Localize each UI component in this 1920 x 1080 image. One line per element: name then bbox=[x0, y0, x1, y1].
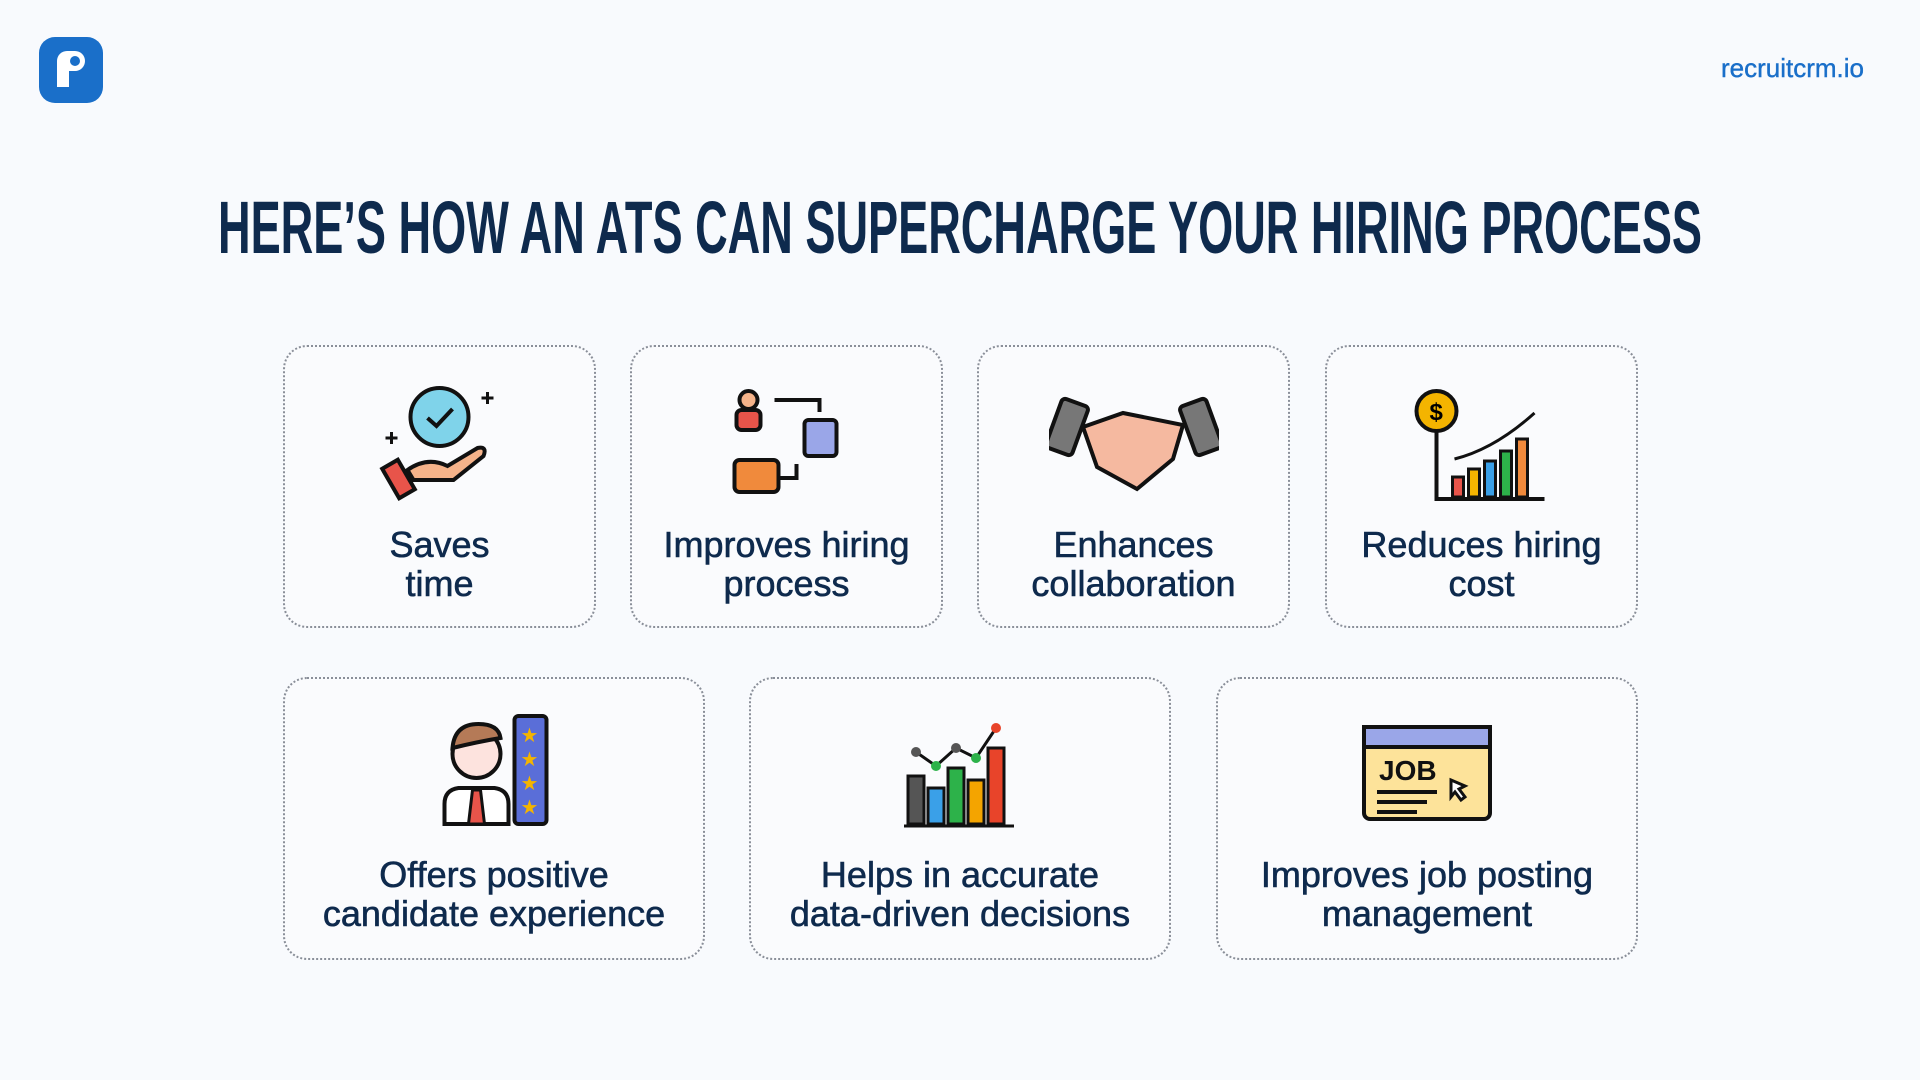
icon: cost chart bbox=[1414, 389, 1544, 501]
card: candidate experience bbox=[283, 677, 705, 960]
label bbox=[323, 854, 665, 934]
label: data-driven decisions bbox=[790, 893, 1130, 934]
icon: candidate rating bbox=[442, 714, 548, 826]
label bbox=[663, 524, 910, 604]
card: improves hiring process bbox=[630, 345, 943, 628]
label bbox=[1031, 524, 1236, 604]
icon: bar chart bbox=[904, 723, 1014, 828]
label: Saves bbox=[389, 524, 490, 565]
logo bbox=[39, 37, 103, 103]
icon: job window: JOB bbox=[1379, 755, 1437, 786]
card: reduces hiring cost bbox=[1325, 345, 1638, 628]
label: time bbox=[405, 563, 474, 604]
label bbox=[1361, 524, 1602, 604]
label bbox=[790, 854, 1130, 934]
icon: handshake bbox=[1049, 396, 1219, 492]
label: process bbox=[723, 563, 850, 604]
label: management bbox=[1322, 893, 1532, 934]
card: data-driven decisions bbox=[749, 677, 1171, 960]
icon: candidate rating: ★ bbox=[520, 797, 538, 819]
icon: candidate rating: ★ bbox=[520, 773, 538, 795]
icon: candidate rating: ★ bbox=[520, 749, 538, 771]
icon: job window bbox=[1362, 725, 1492, 821]
label: Enhances bbox=[1053, 524, 1214, 565]
icon: candidate rating: ★ bbox=[520, 725, 538, 747]
label bbox=[1261, 854, 1593, 934]
label: Improves hiring bbox=[663, 524, 910, 565]
icon: process bbox=[732, 389, 838, 494]
icon: clock in hand bbox=[380, 386, 494, 501]
card: job posting bbox=[1216, 677, 1638, 960]
brand url: recruitcrm.io bbox=[1721, 53, 1864, 83]
label: collaboration bbox=[1031, 563, 1236, 604]
label bbox=[389, 524, 490, 604]
label: candidate experience bbox=[323, 893, 665, 934]
label: Offers positive bbox=[379, 854, 609, 895]
label: Improves job posting bbox=[1261, 854, 1593, 895]
card: enhances collaboration bbox=[977, 345, 1290, 628]
label: Helps in accurate bbox=[821, 854, 1099, 895]
label: cost bbox=[1448, 563, 1515, 604]
label: Reduces hiring bbox=[1361, 524, 1602, 565]
card: saves time bbox=[283, 345, 596, 628]
icon: cost chart: $ bbox=[1429, 399, 1443, 426]
